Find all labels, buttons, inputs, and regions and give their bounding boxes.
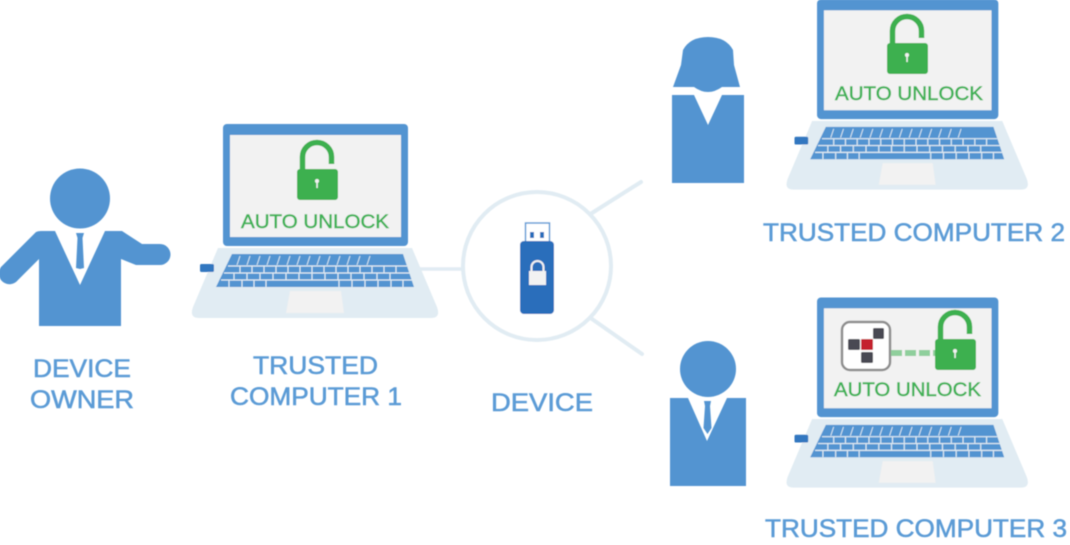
connector: device to laptop 2	[592, 182, 641, 213]
icon: app logo	[842, 322, 890, 370]
connector: laptop 1 to device	[418, 267, 462, 271]
device circle with usb drive	[463, 192, 611, 340]
connector: device to laptop 3	[592, 319, 642, 354]
label: device owner: OWNER	[30, 386, 134, 414]
icon: device owner figure	[0, 168, 170, 326]
label: device owner	[30, 355, 134, 414]
laptop: trusted computer 3	[787, 298, 1028, 488]
icon: woman figure	[672, 37, 744, 183]
laptop: trusted computer 2	[787, 0, 1028, 190]
label: auto unlock 2: AUTO UNLOCK	[835, 84, 983, 105]
label: trusted computer 2: TRUSTED COMPUTER 2	[763, 219, 1065, 247]
label: auto unlock 3: AUTO UNLOCK	[834, 380, 981, 401]
label: trusted computer 1	[230, 352, 402, 411]
label: trusted computer 1: COMPUTER 1	[230, 383, 402, 411]
dashed link	[891, 350, 935, 356]
label: trusted computer 1: TRUSTED	[253, 352, 378, 380]
label: auto unlock 1: AUTO UNLOCK	[241, 212, 389, 233]
icon: usb drive	[520, 223, 554, 314]
label: device: DEVICE	[491, 389, 593, 417]
label: trusted computer 3: TRUSTED COMPUTER 3	[765, 515, 1067, 543]
label: device owner: DEVICE	[33, 355, 131, 383]
laptop: trusted computer 1	[192, 124, 438, 318]
icon: green open lock 1	[297, 142, 338, 200]
icon: green open lock 2	[887, 16, 928, 74]
icon: green open lock 3	[935, 312, 976, 370]
icon: man figure	[670, 341, 746, 486]
